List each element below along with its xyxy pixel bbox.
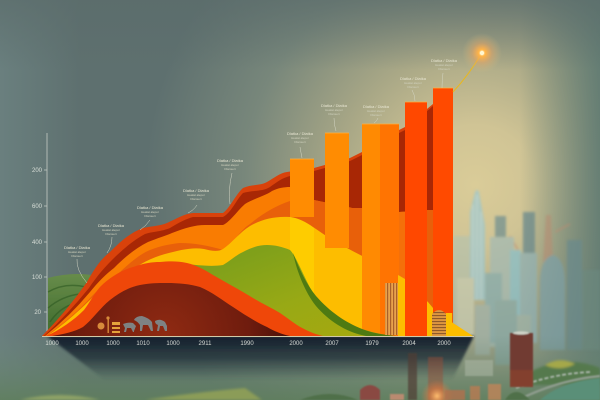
- hill inside chart: [48, 274, 92, 336]
- stacked area layers: [42, 95, 473, 336]
- callout 6: [287, 131, 314, 158]
- x axis labels: [45, 341, 451, 347]
- callout 1: Dlansert: [71, 254, 83, 258]
- callout 3: Healat alepor: [141, 210, 159, 214]
- callout 9: Healat alepor: [404, 81, 422, 85]
- x axis labels: 2004: [402, 341, 416, 347]
- callout 1: [64, 245, 91, 283]
- callout 10: Healat alepor: [435, 63, 453, 67]
- x axis labels: 1010: [136, 341, 150, 347]
- callout 10: Dlatka / Dlatka: [431, 58, 458, 63]
- city skyline: [453, 190, 600, 365]
- callout 8: Healat alepor: [367, 109, 385, 113]
- orange strip between bars 3 and 4: [399, 212, 405, 282]
- callout 4: [183, 188, 210, 213]
- x axis labels: 1000: [45, 341, 59, 347]
- layer: top red-orange band: [42, 95, 453, 336]
- y labels: 600: [32, 204, 43, 210]
- callout 7: Dlansert: [328, 112, 340, 116]
- axis y: [32, 133, 47, 336]
- bar 4: [405, 102, 427, 336]
- layer: red-orange: [46, 261, 323, 336]
- lower ground haze: [0, 335, 600, 400]
- river and bridge: [516, 372, 600, 400]
- layer: dark red base: [52, 283, 290, 336]
- layer: dark red band: [44, 98, 453, 336]
- arrow: glowing line to sun: [453, 33, 502, 92]
- y labels: 400: [32, 240, 43, 246]
- x axis labels: 1000: [75, 341, 89, 347]
- callout 1: Dlatka / Dlatka: [64, 245, 91, 250]
- callout 6: Dlansert: [294, 140, 306, 144]
- callout 3: [137, 205, 164, 230]
- x axis labels: 1990: [240, 341, 254, 347]
- callout 7: [321, 103, 348, 131]
- bars: [290, 88, 453, 336]
- callout 3: Dlansert: [144, 214, 156, 218]
- callout 10: Dlansert: [438, 67, 450, 71]
- x axis labels: 2911: [199, 341, 212, 347]
- callout 2: [98, 223, 125, 253]
- callout 7: Healat alepor: [325, 108, 343, 112]
- small yellow wedge: [398, 275, 405, 336]
- hills at bottom: [20, 360, 600, 400]
- callout 9: [400, 76, 427, 101]
- y labels: 200: [32, 168, 43, 174]
- x axis labels: 1000: [106, 341, 120, 347]
- callout 9: Dlatka / Dlatka: [400, 76, 427, 81]
- callout 2: Dlatka / Dlatka: [98, 223, 125, 228]
- callout 7: Dlatka / Dlatka: [321, 103, 348, 108]
- bar 1: [290, 159, 314, 310]
- callout 5: Healat alepor: [221, 163, 239, 167]
- callout 8: Dlansert: [370, 113, 382, 117]
- x axis labels: 2007: [325, 341, 339, 347]
- floor shadow: [47, 336, 474, 380]
- x axis labels: 2000: [289, 341, 303, 347]
- layer: yellow: [47, 217, 473, 336]
- callout 5: Dlansert: [224, 167, 236, 171]
- callout 1: Healat alepor: [68, 250, 86, 254]
- callout 6: Healat alepor: [291, 136, 309, 140]
- bar 2: [325, 133, 349, 328]
- baseline: [42, 336, 474, 338]
- callout 9: Dlansert: [407, 85, 419, 89]
- callout 4: Dlatka / Dlatka: [183, 188, 210, 193]
- layer: green: [160, 245, 393, 336]
- callout 6: Dlatka / Dlatka: [287, 131, 314, 136]
- callout 8: [363, 104, 390, 123]
- callout 5: [217, 158, 244, 204]
- x axis labels: 1979: [365, 341, 379, 347]
- icons: animals: [123, 316, 167, 332]
- x axis labels: 2000: [437, 341, 451, 347]
- callout 3: Dlatka / Dlatka: [137, 205, 164, 210]
- callout 4: Healat alepor: [187, 193, 205, 197]
- callout 4: Dlansert: [190, 197, 202, 201]
- x axis labels: 1000: [166, 341, 180, 347]
- layer: green dark edge: [293, 253, 396, 336]
- callout 2: Dlansert: [105, 232, 117, 236]
- layer: orange band: [45, 187, 453, 336]
- callout 10: [431, 58, 458, 88]
- y labels: 100: [32, 275, 43, 281]
- bar 3: [362, 124, 399, 336]
- y labels: 20: [34, 310, 42, 316]
- y labels: [32, 168, 43, 316]
- callout 8: Dlatka / Dlatka: [363, 104, 390, 109]
- foreground buildings: [300, 331, 533, 400]
- callout 2: Healat alepor: [102, 228, 120, 232]
- layer: dark orange band: [46, 200, 453, 336]
- bar 5: [433, 88, 453, 313]
- icons: sun, figure and flag: [98, 316, 120, 333]
- small striped buildings: [385, 283, 452, 336]
- callout 5: Dlatka / Dlatka: [217, 158, 244, 163]
- bar highlight edges: [290, 88, 453, 159]
